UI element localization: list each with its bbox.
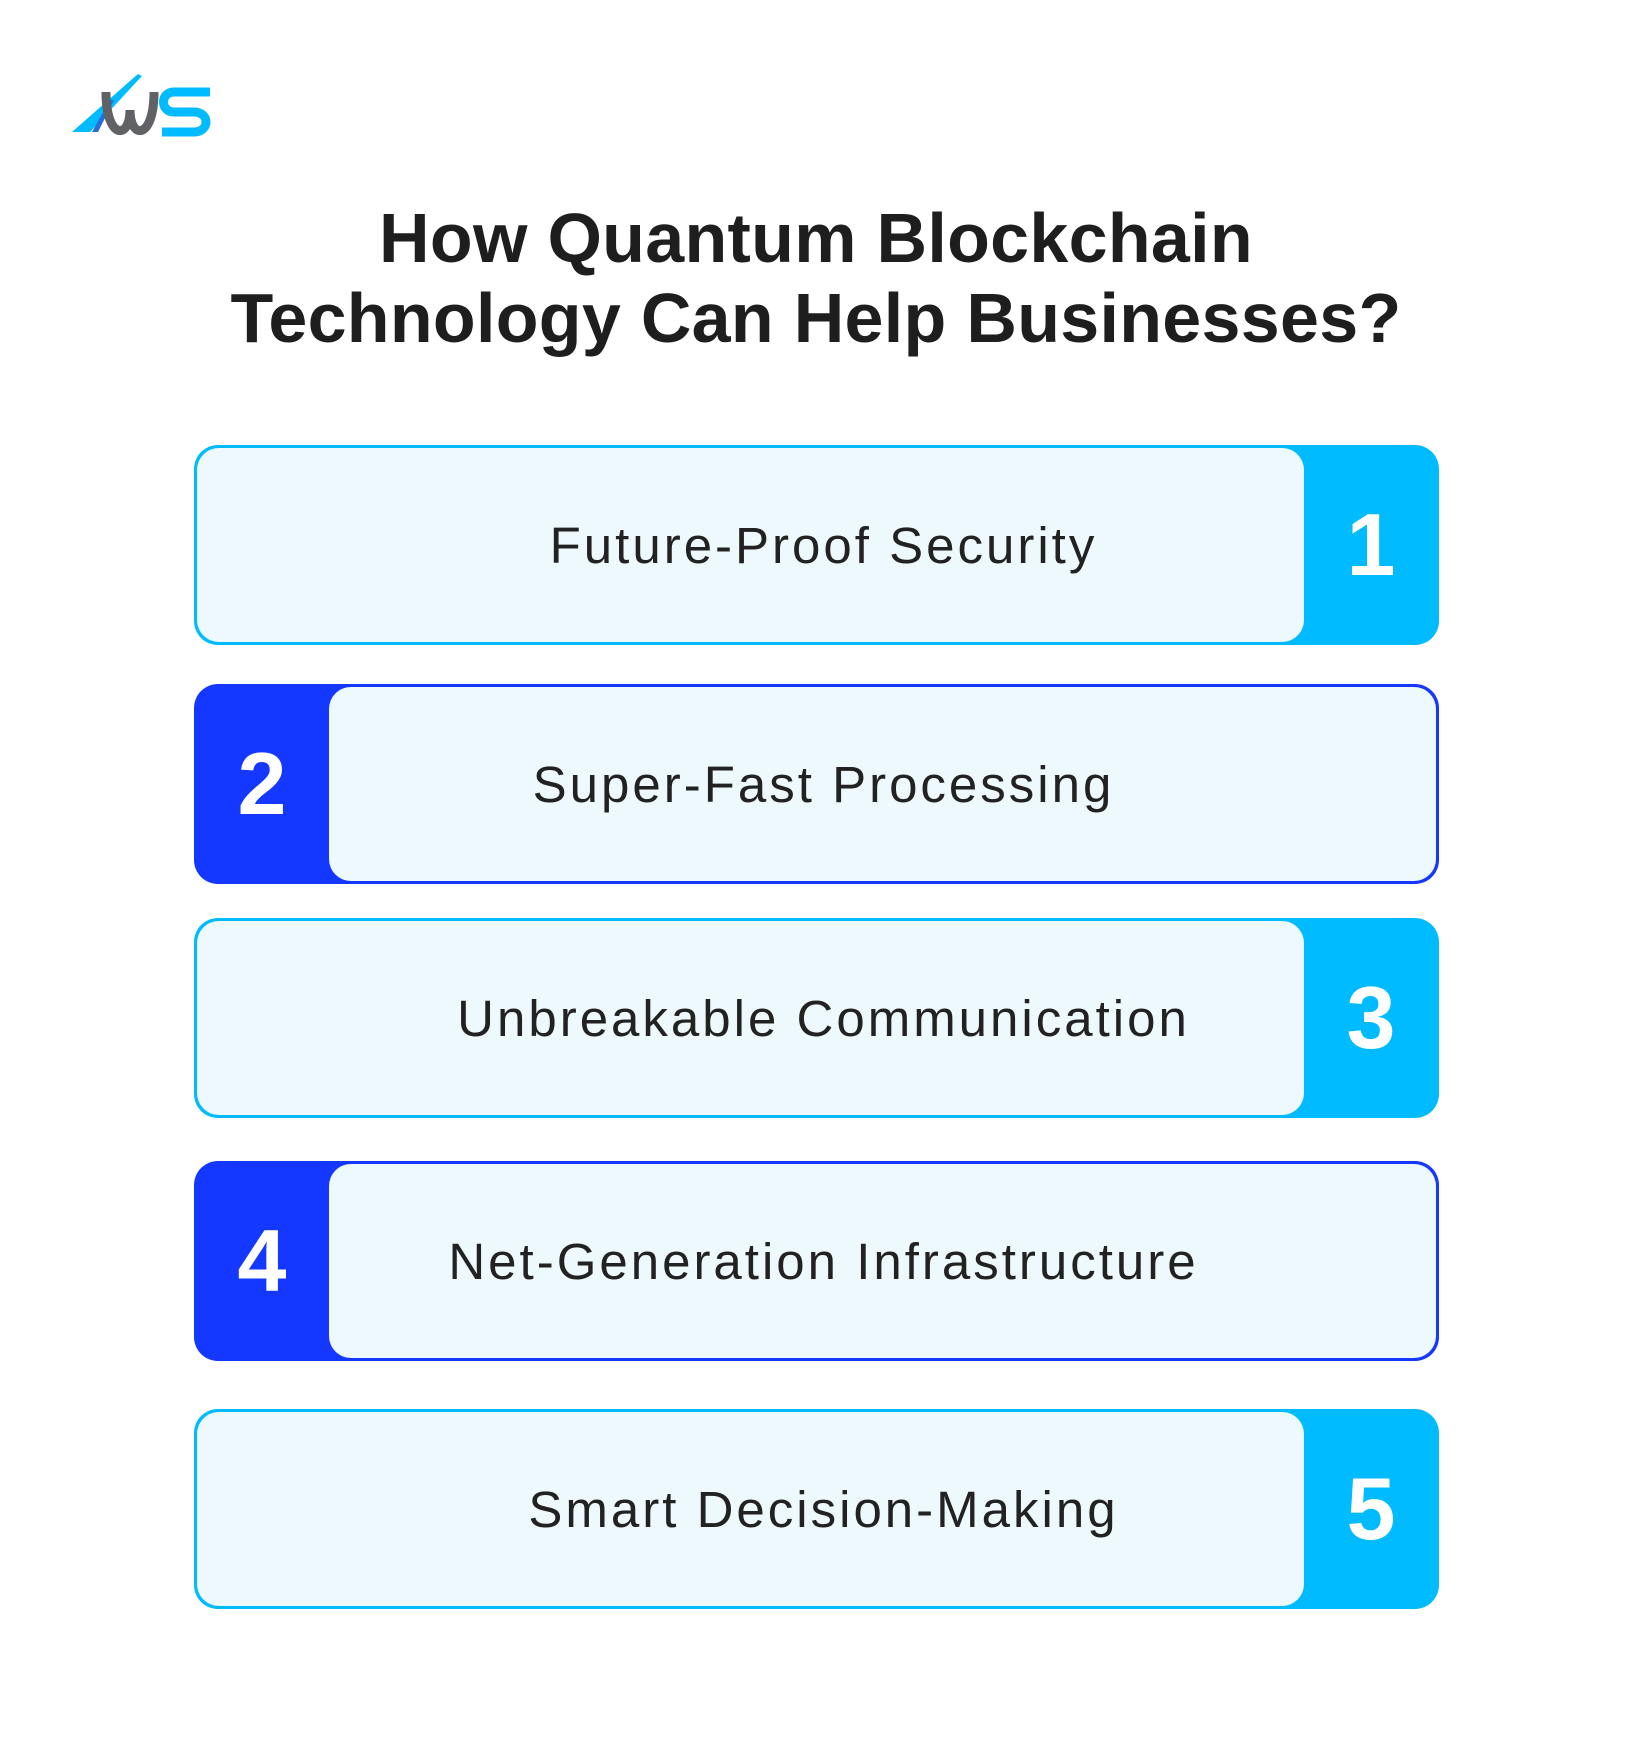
number 4: 4: [238, 1211, 286, 1310]
card 5: [194, 1409, 1439, 1609]
text: item 4: Net-Generation Infrastructure: [448, 1232, 1199, 1290]
card 2: [194, 684, 1439, 884]
title: How Quantum Blockchain: [379, 199, 1253, 277]
text: item 5: [197, 1412, 1304, 1606]
logo: [72, 74, 210, 136]
text: item 1: [197, 448, 1304, 642]
card 4: [194, 1161, 1439, 1361]
text: item 4: [329, 1164, 1436, 1358]
card 1: [194, 445, 1439, 645]
text: item 5: Smart Decision-Making: [528, 1480, 1119, 1538]
number 2: 2: [238, 734, 286, 833]
text: item 3: [197, 921, 1304, 1115]
number 3: 3: [1347, 968, 1395, 1067]
text: item 3: Unbreakable Communication: [457, 990, 1190, 1046]
text: item 2: [329, 687, 1436, 881]
text: item 2: Super-Fast Processing: [533, 756, 1114, 812]
title: Technology Can Help Businesses?: [230, 279, 1402, 357]
number 5: 5: [1347, 1459, 1395, 1558]
number 1: 1: [1347, 495, 1395, 594]
title: [230, 199, 1402, 357]
card 3: [194, 918, 1439, 1118]
text: item 1: Future-Proof Security: [550, 516, 1097, 574]
